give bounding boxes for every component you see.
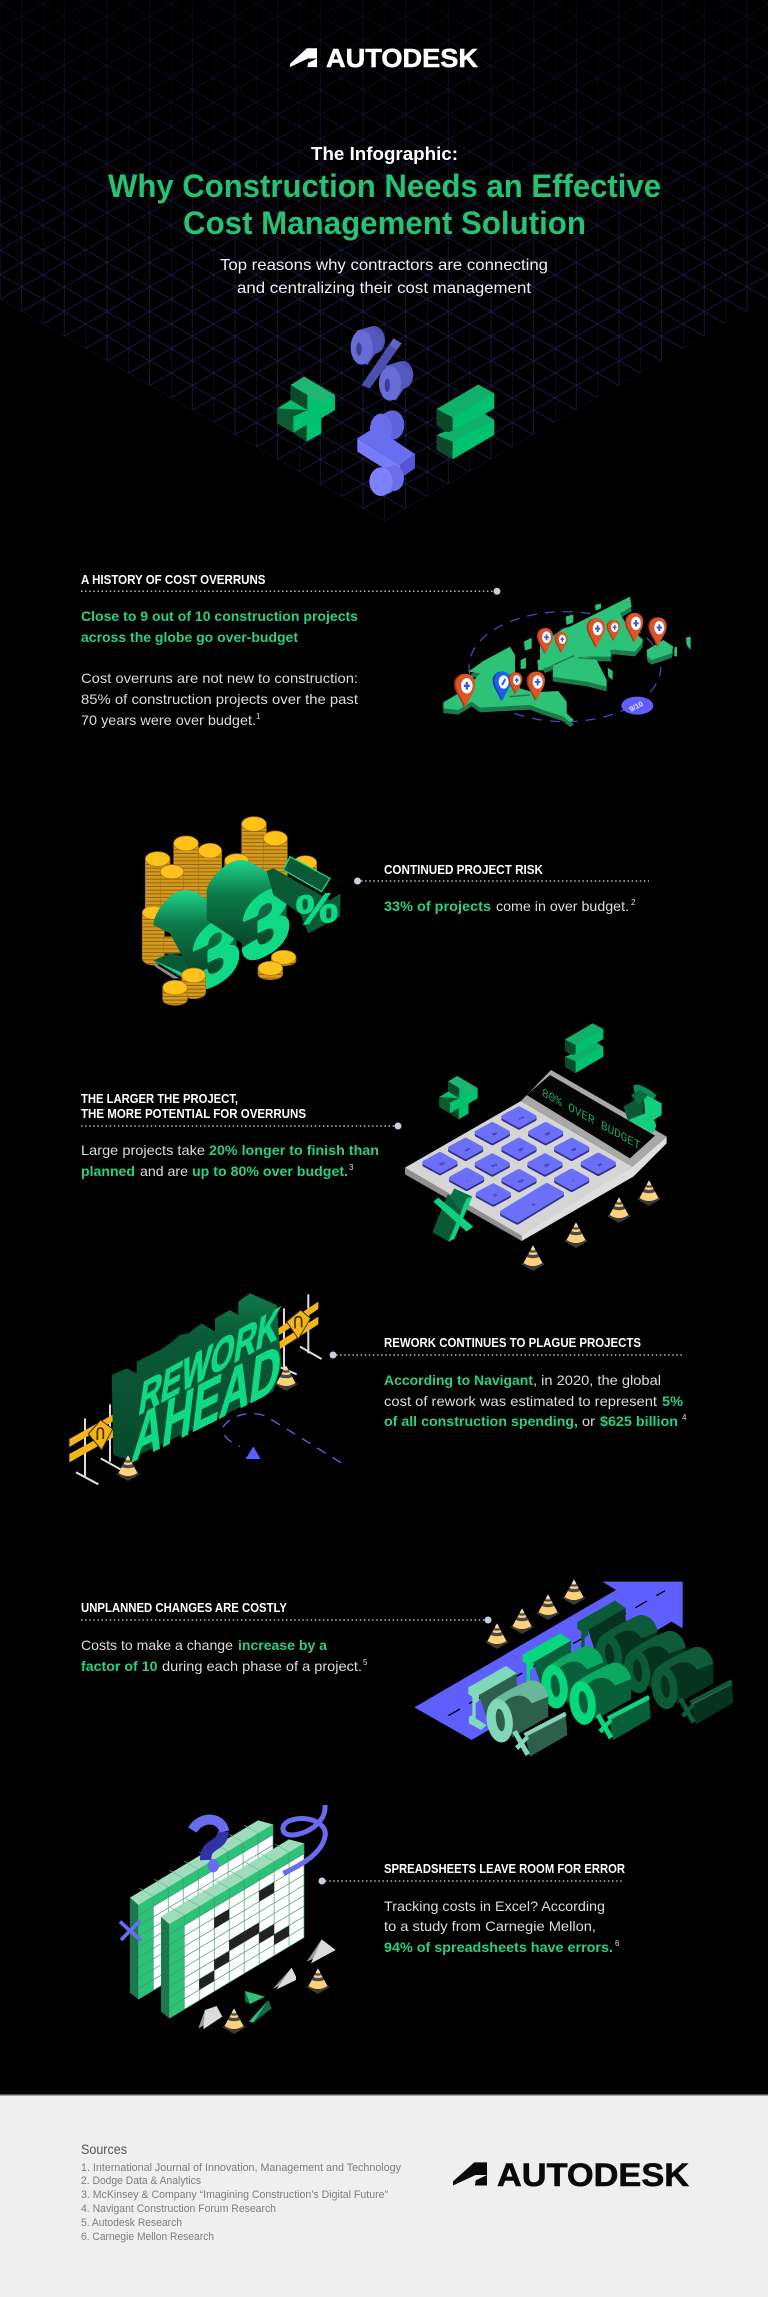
body text [81,1142,379,1179]
heading: A HISTORY OF COST OVERRUNS [81,572,266,587]
body text: planned [81,1163,135,1179]
title block: The Infographic: [311,144,458,164]
body text: 2 [631,898,636,907]
sources list: 1. International Journal of Innovation, Management and Technology [81,2162,401,2174]
mint 10x row [468,1666,567,1757]
body text: 1 [256,712,261,721]
key labels: 2 [489,1163,499,1168]
key labels: 0 [437,1162,446,1167]
logo: Autodesk top: AUTODESK [326,43,478,73]
heading: UNPLANNED CHANGES ARE COSTLY [81,1600,287,1615]
cones near spreadsheets [222,1968,330,2034]
icon: floating Z [565,1023,603,1073]
calculator keys [425,1109,614,1222]
body text: 3 [349,1163,354,1172]
heading: THE LARGER THE PROJECT, [81,1091,238,1106]
badge 9/10: 9/10 [628,699,645,714]
body text: 20% longer to finish than [209,1142,379,1158]
body text [81,1637,368,1674]
key labels: 7 [516,1116,525,1121]
illustration: rework ahead sign [69,1293,341,1484]
section: continued project risk [354,862,649,914]
map land tops [443,597,691,722]
heading: REWORK CONTINUES TO PLAGUE PROJECTS [384,1335,641,1350]
heading: THE MORE POTENTIAL FOR OVERRUNS [81,1106,306,1121]
body text: According to Navigant [384,1372,533,1388]
bright 10x row [523,1633,651,1740]
key labels: 5 [516,1147,525,1153]
green fragments [245,1991,272,2023]
body text: $625 billion [600,1413,678,1429]
body text: or [582,1413,595,1429]
sources list: 5. Autodesk Research [81,2217,182,2229]
illustration: spreadsheets [120,1805,336,2029]
illustration: 10x arrow [414,1582,733,1757]
purple arrow road [414,1582,683,1740]
heading [81,1091,306,1121]
key labels [437,1116,605,1208]
body text: during each phase of a project. [162,1658,362,1674]
question mark [192,1820,224,1872]
body text: 5 [363,1658,368,1667]
key labels: 4 [489,1132,499,1137]
body text [384,898,636,914]
green callout [81,608,358,645]
body text: of all construction spending, [384,1413,578,1429]
title block: and centralizing their cost management [237,280,532,297]
cones near calculator [521,1180,661,1271]
body text: Large projects take [81,1142,205,1158]
squiggle [283,1805,325,1873]
icon: percent sign [351,326,413,401]
sources list: 4. Navigant Construction Forum Research [81,2203,276,2215]
title block: Top reasons why contractors are connecting [220,257,548,274]
body text: to a study from Carnegie Mellon, [384,1918,596,1934]
extruded number 33: 3 [241,862,291,985]
body text: come in over budget. [496,898,629,914]
body text: 5% [662,1393,684,1409]
body text: Cost overruns are not new to construction: [81,670,358,686]
icon: floating plus [439,1076,478,1119]
body text: 85% of construction projects over the past [81,691,358,707]
dashed orbit [469,612,661,722]
body text: and are [140,1163,188,1179]
key labels: 8 [542,1132,552,1137]
illustration: world map with pins [443,597,691,727]
icon: floating dollar [623,1085,662,1132]
section: rework continues [330,1335,687,1429]
green callout: Close to 9 out of 10 construction projects [81,608,358,624]
body text: cost of rework was estimated to represent [384,1393,657,1409]
divider with dot [354,878,649,884]
body text: increase by a [238,1637,327,1653]
cones near arrow [485,1580,586,1649]
sources list: 6. Carnegie Mellon Research [81,2231,214,2243]
sources list: 3. McKinsey & Company “Imagining Construction’s Digital Future” [81,2189,388,2201]
body text [384,1898,620,1955]
map land sides [443,601,673,727]
display text: 80% OVER BUDGET [541,1085,641,1154]
illustration: hero cost symbols [277,326,494,496]
icon: green X [432,1188,473,1242]
dashed path with arrowhead [223,1414,341,1463]
sources list: 2. Dodge Data & Analytics [81,2175,201,2187]
location pins [454,613,667,708]
extruded number 33 [153,860,291,1014]
body text [384,1372,687,1429]
body text: , in 2020, the global [533,1372,661,1388]
divider with dot [81,1616,492,1624]
body text: Tracking costs in Excel? According [384,1898,605,1914]
section: a history of cost overruns [81,572,500,728]
dark 10x row [577,1601,733,1724]
sign text: REWORK: REWORK [136,1296,283,1426]
body text [81,670,358,728]
title block [108,144,661,297]
front spreadsheet [161,1839,304,2018]
extruded percent [267,857,341,934]
green plate [153,953,205,992]
body text: 4 [682,1413,687,1422]
section: spreadsheets leave room for error [318,1861,626,1955]
coin stacks front [163,950,296,1005]
green callout: across the globe go over-budget [81,629,298,645]
isometric grid background [0,0,768,521]
body text: 33% of projects [384,898,491,914]
key labels: 6 [542,1163,551,1168]
grey rocks [198,1939,336,2029]
body text: 6 [615,1939,620,1948]
body text: up to 80% over budget. [192,1163,348,1179]
badge 9/10 [621,697,653,715]
divider with dot [81,1122,402,1130]
key labels: + [528,1202,538,1208]
icon: green Z shape [437,385,494,459]
body text: 94% of spreadsheets have errors. [384,1939,613,1955]
section: unplanned changes [81,1600,492,1674]
body text: factor of 10 [81,1658,158,1674]
divider with dot [81,588,500,595]
icon: green plus [277,377,335,442]
heading: SPREADSHEETS LEAVE ROOM FOR ERROR [384,1861,626,1876]
key labels: = [490,1193,499,1198]
logo: Autodesk bottom: AUTODESK [497,2157,689,2193]
section: the larger the project [81,1091,402,1179]
illustration: calculator [405,1023,667,1242]
divider with dot [318,1878,624,1884]
key labels: . [464,1178,472,1182]
coast outlines [509,656,593,697]
barricade right [268,1294,322,1374]
icon: dollar symbol [357,410,415,496]
key labels: 1 [462,1147,472,1153]
key labels: - [569,1179,577,1183]
panel: footer [0,2094,768,2297]
body text: Costs to make a change [81,1637,233,1653]
title block: Why Construction Needs an Effective [108,168,661,204]
extruded number 33: 3 [191,891,241,1014]
calculator body [405,1070,667,1241]
back spreadsheet [130,1820,273,1999]
error cells [199,1882,289,1990]
title block: Cost Management Solution [183,205,586,241]
key labels: 3 [516,1179,525,1184]
heading: CONTINUED PROJECT RISK [384,862,544,877]
divider with dot [330,1352,683,1358]
illustration: 33 percent with coin stacks [142,817,341,1014]
extruded letters backing [112,1293,282,1460]
key labels: 9 [568,1147,578,1153]
sources heading: Sources [81,2141,127,2157]
sources list [81,2162,401,2243]
purple X [120,1921,141,1941]
cones near sign [116,1366,298,1481]
coin stacks back [142,817,317,965]
extruded percent: % [296,883,338,934]
body text: 70 years were over budget. [81,712,256,728]
barricade left [69,1404,122,1484]
key labels: x [595,1162,605,1168]
sign text: AHEAD: AHEAD [129,1330,285,1478]
